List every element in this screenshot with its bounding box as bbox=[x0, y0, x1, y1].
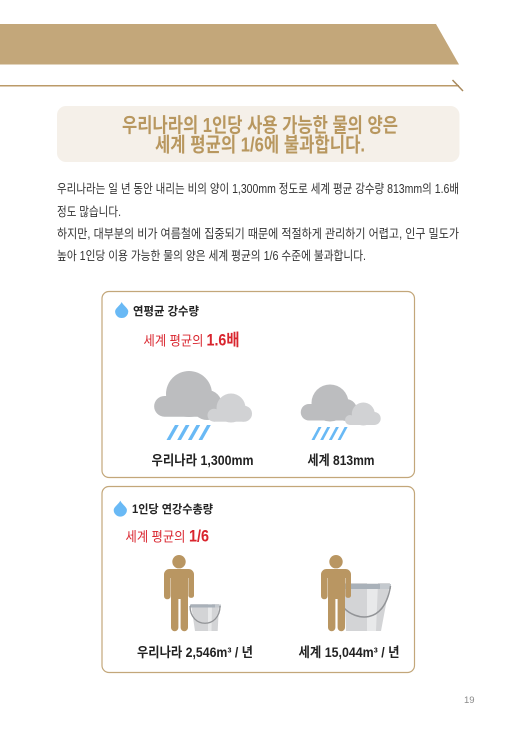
body text bbox=[57, 182, 459, 263]
callout: 1.6 times: 1.6배 bbox=[206, 330, 240, 350]
panel heading: 연평균 강수량 bbox=[133, 305, 199, 318]
icon: small bucket bbox=[190, 604, 221, 631]
body text: 하지만, 대부분의 비가 여름철에 집중되기 때문에 적절하게 관리하기 어렵고, 인구 밀도가 bbox=[57, 227, 459, 241]
title text bbox=[122, 114, 398, 156]
label: Korea per person: 우리나라 2,546m³ / 년 bbox=[137, 645, 253, 660]
callout: one sixth: 세계 평균의 bbox=[126, 530, 186, 544]
panel: annual water per person bbox=[102, 486, 414, 672]
icon: water drop bbox=[114, 501, 127, 517]
body text: 높아 1인당 이용 가능한 물의 양은 세계 평균의 1/6 수준에 불과합니다. bbox=[57, 249, 366, 263]
title text: 우리나라의 1인당 사용 가능한 물의 양은 bbox=[122, 114, 398, 137]
label: world per person: 세계 15,044m³ / 년 bbox=[298, 645, 400, 660]
icon: large rain cloud bbox=[154, 371, 252, 440]
icon: person, Korea bbox=[164, 555, 194, 631]
page number: 19 bbox=[464, 695, 475, 706]
callout: 1.6 times bbox=[144, 330, 240, 350]
panel: annual precipitation bbox=[102, 292, 414, 478]
callout: one sixth bbox=[126, 528, 209, 546]
title text: 세계 평균의 1/6에 불과합니다. bbox=[155, 134, 365, 156]
title box bbox=[57, 106, 460, 162]
body text: 정도 많습니다. bbox=[57, 205, 121, 219]
callout: 1.6 times: 세계 평균의 bbox=[144, 334, 204, 348]
header banner bbox=[0, 24, 459, 64]
icon: person, world bbox=[321, 555, 351, 631]
panel heading: 1인당 연강수총량 bbox=[132, 503, 213, 516]
icon: small rain cloud bbox=[301, 384, 381, 440]
callout: one sixth: 1/6 bbox=[189, 528, 209, 546]
icon: large bucket bbox=[344, 583, 391, 631]
icon: water drop bbox=[115, 302, 128, 318]
label: Korea rainfall: 우리나라 1,300mm bbox=[152, 453, 254, 468]
label: world rainfall: 세계 813mm bbox=[308, 453, 374, 468]
header rule bbox=[0, 80, 463, 91]
